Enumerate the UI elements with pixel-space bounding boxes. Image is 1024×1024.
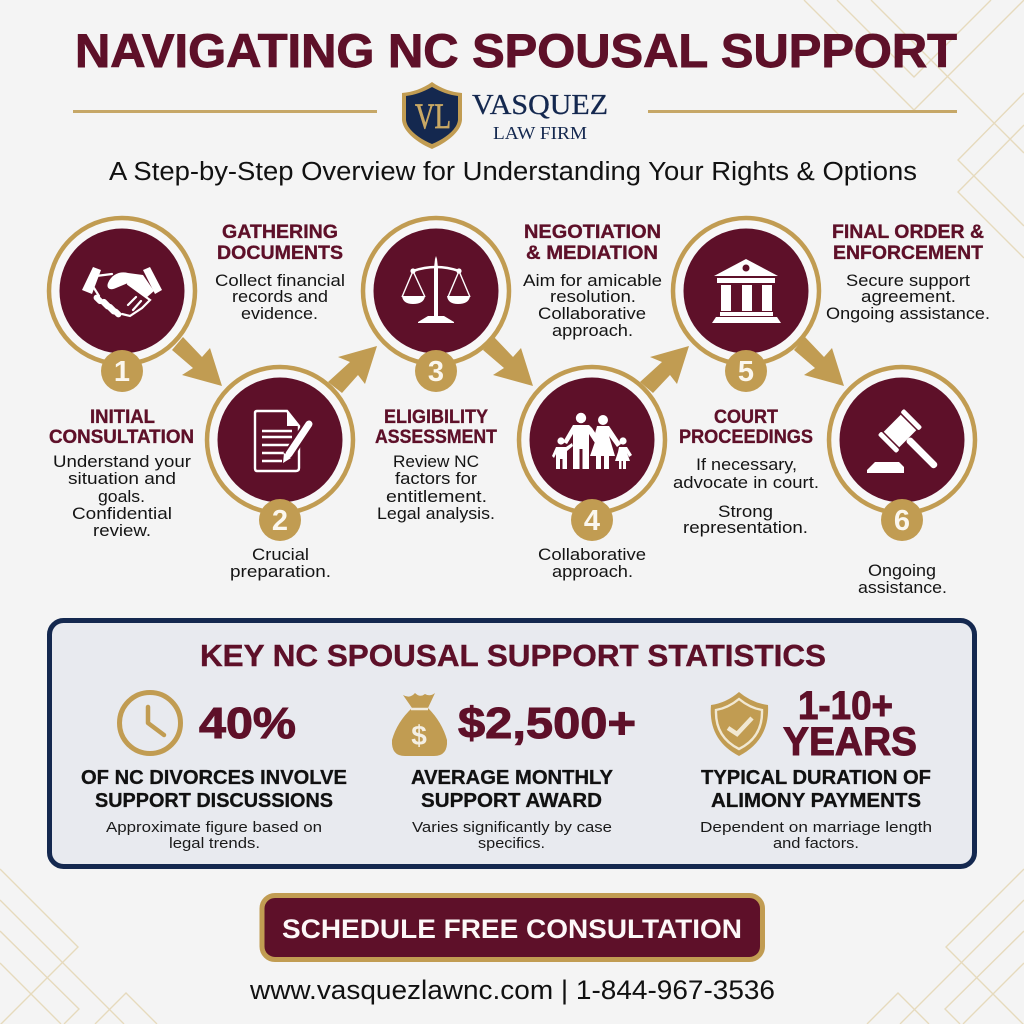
number badge 2: 2 — [272, 505, 288, 537]
stat label — [81, 767, 347, 812]
arrow: step 3 to 4 — [483, 337, 533, 386]
step 5 text: Court Proceedings: PROCEEDINGS — [679, 427, 813, 448]
icon: document and pen — [255, 411, 309, 471]
step 3 text: Eligibility Assessment: ELIGIBILITY — [384, 407, 488, 428]
stat label: AVERAGE MONTHLY — [411, 767, 614, 789]
stat note: and factors. — [773, 835, 859, 852]
step 1 node — [49, 218, 195, 392]
icon: money bag — [392, 693, 447, 756]
number badge 1: 1 — [114, 356, 130, 388]
step 5 node — [673, 218, 819, 392]
step 1 text: Initial Consultation: situation and — [68, 470, 176, 488]
stat label: SUPPORT DISCUSSIONS — [95, 790, 333, 812]
number badge 1 — [101, 350, 143, 392]
step 2 text: Gathering Documents: evidence. — [241, 305, 318, 323]
stat label — [701, 767, 931, 812]
icon: money bag: $ — [411, 720, 427, 751]
step 2 text: Gathering Documents: GATHERING — [222, 222, 338, 243]
stat note: specifics. — [478, 835, 545, 852]
icon: courthouse — [712, 259, 781, 323]
icon: scales of justice — [402, 256, 470, 323]
number badge 4 — [571, 499, 613, 541]
panel: key statistics — [50, 620, 974, 866]
step 1 text: Initial Consultation: INITIAL — [90, 407, 155, 428]
number badge 5: 5 — [738, 356, 754, 388]
stat value: YEARS — [783, 720, 917, 764]
step 4 text: Negotiation and Mediation: Collaborative — [538, 546, 646, 564]
icon: logo shield — [402, 82, 462, 149]
step 3 node — [363, 218, 509, 392]
step 1 text: Initial Consultation: CONSULTATION — [49, 427, 194, 448]
number badge 3: 3 — [428, 356, 444, 388]
step 6 text: Final Order and Enforcement: ENFORCEMENT — [833, 243, 983, 264]
icon: clock — [120, 692, 180, 754]
stat value — [783, 684, 917, 764]
step 3 text: Eligibility Assessment: entitlement. — [386, 488, 487, 506]
number badge 3 — [415, 350, 457, 392]
step 2 text: Gathering Documents: Crucial — [252, 546, 309, 564]
icon: gavel — [867, 409, 949, 480]
stat label: SUPPORT AWARD — [421, 790, 602, 812]
panel heading: KEY NC SPOUSAL SUPPORT STATISTICS — [200, 638, 826, 673]
icon: handshake — [82, 267, 162, 319]
step 6 text: Final Order and Enforcement: Ongoing assistance. — [826, 305, 990, 323]
step 1 text: Initial Consultation — [49, 407, 194, 540]
firm subtitle: LAW FIRM — [493, 123, 587, 143]
title: NAVIGATING NC SPOUSAL SUPPORT — [75, 24, 957, 77]
stat value: 1-10+ — [798, 684, 893, 728]
stat label: ALIMONY PAYMENTS — [711, 790, 921, 812]
logo: Vasquez Law Firm — [402, 82, 608, 149]
stat: average award — [392, 693, 636, 852]
step 2 text: Gathering Documents: DOCUMENTS — [217, 243, 343, 264]
number badge 6 — [881, 499, 923, 541]
stat value: $2,500+ — [458, 699, 636, 748]
contact line: www.vasquezlawnc.com | 1-844-967-3536 — [249, 975, 775, 1005]
arrow: step 1 to 2 — [172, 337, 222, 386]
stat label: OF NC DIVORCES INVOLVE — [81, 767, 347, 789]
stat note: Dependent on marriage length — [700, 819, 932, 836]
step 6 text: Final Order and Enforcement: Secure support — [846, 272, 970, 290]
stat note — [412, 819, 612, 852]
step 4 text: Negotiation and Mediation: resolution. — [550, 288, 636, 306]
step 4 text: Negotiation and Mediation: & MEDIATION — [526, 243, 658, 264]
step 2 text: Gathering Documents: records and — [232, 288, 328, 306]
step 3 text: Eligibility Assessment: ASSESSMENT — [375, 427, 497, 448]
step 4 text: Negotiation and Mediation: Collaborative — [538, 305, 646, 323]
icon: logo shield: VL — [415, 96, 451, 136]
arrow: step 4 to 5 — [640, 346, 689, 393]
header rule left — [73, 110, 377, 113]
step 4 text: Negotiation and Mediation — [523, 222, 662, 581]
step 4 text: Negotiation and Mediation: approach. — [552, 563, 633, 581]
stat note: Approximate figure based on — [106, 819, 322, 836]
step 4 text: Negotiation and Mediation: Aim for amicable — [523, 272, 662, 290]
step 1 text: Initial Consultation: Understand your — [53, 453, 192, 471]
step 2 text: Gathering Documents: Collect financial — [215, 272, 345, 290]
step 5 text: Court Proceedings — [673, 407, 819, 537]
stat: 40 percent — [81, 692, 347, 852]
step 2 text: Gathering Documents — [215, 222, 345, 581]
step 3 text: Eligibility Assessment: Legal analysis. — [377, 505, 495, 523]
step 1 text: Initial Consultation: review. — [93, 522, 151, 540]
step 6 node — [829, 367, 975, 541]
icon: family — [552, 413, 632, 469]
button: schedule free consultation — [262, 896, 762, 960]
step 5 text: Court Proceedings: representation. — [683, 519, 808, 537]
stat note: Varies significantly by case — [412, 819, 612, 836]
arrow: step 2 to 3 — [328, 346, 377, 393]
number badge 2 — [259, 499, 301, 541]
step 4 text: Negotiation and Mediation: NEGOTIATION — [524, 222, 661, 243]
button: schedule free consultation: SCHEDULE FREE CONSULTATION — [282, 914, 742, 944]
icon: shield check — [711, 692, 768, 756]
arrow: step 5 to 6 — [794, 337, 844, 386]
step 3 text: Eligibility Assessment: Review NC — [393, 453, 479, 471]
step 6 text: Final Order and Enforcement: assistance. — [858, 579, 947, 597]
step 3 text: Eligibility Assessment: factors for — [395, 470, 478, 488]
step 6 text: Final Order and Enforcement: FINAL ORDER & — [832, 222, 984, 243]
number badge 4: 4 — [584, 505, 600, 537]
number badge 5 — [725, 350, 767, 392]
subtitle: A Step-by-Step Overview for Understanding Your Rights & Options — [109, 158, 917, 186]
step 3 text: Eligibility Assessment — [375, 407, 497, 523]
stat: alimony duration — [700, 684, 932, 852]
header rule right — [648, 110, 957, 113]
step 5 text: Court Proceedings: advocate in court. — [673, 474, 819, 492]
step 2 text: Gathering Documents: preparation. — [230, 563, 331, 581]
stat value: 40% — [199, 699, 296, 748]
step 5 text: Court Proceedings: Strong — [718, 503, 773, 521]
firm name: VASQUEZ — [472, 89, 608, 121]
stat label: TYPICAL DURATION OF — [701, 767, 931, 789]
step 6 text: Final Order and Enforcement: Ongoing — [868, 562, 936, 580]
step 6 text: Final Order and Enforcement: agreement. — [861, 288, 956, 306]
step 6 text: Final Order and Enforcement — [826, 222, 990, 597]
step 4 node — [519, 367, 665, 541]
step 1 text: Initial Consultation: Confidential — [72, 505, 172, 523]
stat note — [700, 819, 932, 852]
step 2 node — [207, 367, 353, 541]
step 4 text: Negotiation and Mediation: approach. — [552, 322, 633, 340]
step 1 text: Initial Consultation: goals. — [98, 488, 145, 506]
step 5 text: Court Proceedings: If necessary, — [696, 456, 797, 474]
number badge 6: 6 — [894, 505, 910, 537]
stat note: legal trends. — [169, 835, 260, 852]
stat label — [411, 767, 614, 812]
stat note — [106, 819, 322, 852]
step 5 text: Court Proceedings: COURT — [714, 407, 778, 428]
